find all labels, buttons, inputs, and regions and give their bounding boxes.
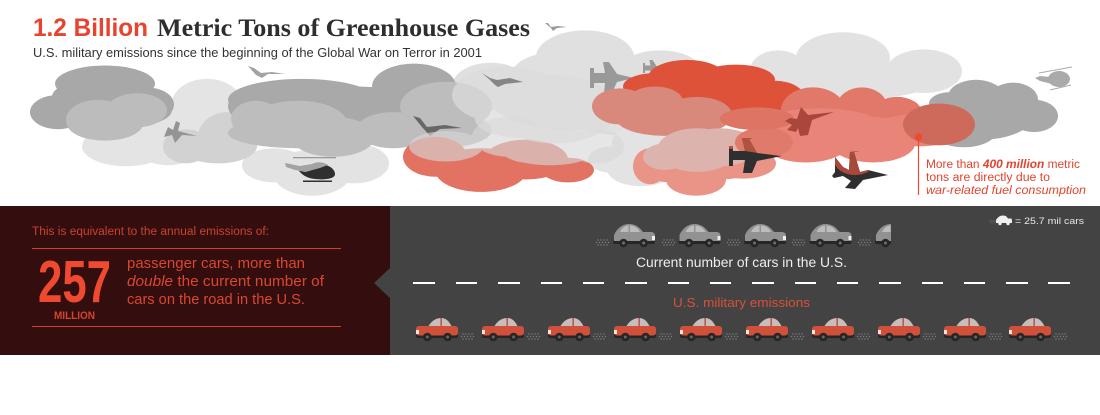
cloud: far-left mid grey bbox=[66, 93, 167, 141]
cloud: left centre mid grey bbox=[163, 112, 258, 163]
icon: plane centre bbox=[413, 116, 462, 136]
million label: MILLION bbox=[54, 310, 95, 322]
cloud: lower centre red bbox=[403, 137, 594, 192]
legend: = 25.7 mil cars bbox=[1015, 216, 1084, 227]
cloud: top-right light grey bbox=[750, 32, 962, 100]
cloud: pink band right bbox=[760, 108, 964, 162]
cloud: translucent pale centre bbox=[452, 66, 617, 143]
panel intro text: This is equivalent to the annual emissions of: bbox=[32, 226, 269, 238]
cloud: lower centre light grey bbox=[588, 122, 708, 186]
icon: plane upper left bbox=[248, 66, 285, 78]
cloud: translucent red overlay bbox=[735, 127, 793, 158]
label: military emissions: U.S. military emissions bbox=[673, 295, 811, 310]
grey cars row bbox=[596, 224, 917, 247]
panel: road bbox=[374, 206, 1100, 355]
cloud: lower light grey bbox=[242, 143, 389, 196]
cloud: callout red oval bbox=[903, 104, 975, 145]
description text: double the current number of bbox=[127, 274, 325, 290]
icon: dark jet centre right bbox=[729, 138, 782, 173]
icon: plane upper centre bbox=[482, 73, 523, 87]
callout: war-related fuel: tons are directly due to bbox=[926, 172, 1050, 184]
panel: equivalent emissions bbox=[0, 206, 390, 355]
legend bbox=[989, 216, 1084, 227]
cloud: far-left light grey bbox=[82, 79, 245, 166]
icon: red jet upper right bbox=[785, 107, 834, 136]
cloud: small red oval bbox=[720, 107, 794, 130]
cloud: far-right dark grey bbox=[929, 80, 1058, 147]
icon: plane left bbox=[164, 121, 197, 143]
subtitle: U.S. military emissions since the beginning of the Global War on Terror in 2001 bbox=[33, 46, 482, 60]
cloud: pink lower bbox=[633, 140, 776, 196]
title bbox=[33, 14, 530, 42]
cloud: centre mid grey bbox=[228, 82, 492, 157]
cloud: centre dark grey bbox=[228, 64, 477, 148]
icon: plane top centre large bbox=[590, 62, 634, 93]
icon: plane top centre small bbox=[643, 60, 665, 76]
description text: passenger cars, more than bbox=[127, 256, 305, 272]
title: Metric Tons of Greenhouse Gases bbox=[157, 15, 530, 42]
icon: helicopter upper right bbox=[1035, 67, 1072, 90]
callout: war-related fuel: war-related fuel consumption bbox=[926, 185, 1086, 197]
red cars row bbox=[416, 318, 1067, 341]
cloud: translucent grey over red bbox=[409, 117, 624, 165]
cloud: pale pink lower bbox=[643, 128, 758, 172]
icon: helicopter lower left bbox=[285, 157, 336, 182]
big number: 257 bbox=[38, 249, 111, 315]
icon: plane near title bbox=[545, 23, 567, 31]
callout: war-related fuel: More than 400 million metric bbox=[926, 159, 1080, 171]
cloud: centre top light grey bbox=[452, 30, 702, 135]
title: 1.2 Billion bbox=[33, 14, 148, 42]
cloud: muted red left bbox=[592, 86, 732, 136]
description text bbox=[127, 256, 325, 308]
cloud: red band right bbox=[778, 87, 922, 133]
road dashes bbox=[413, 282, 1070, 284]
cloud: solid red top bbox=[623, 60, 805, 117]
callout: war-related fuel bbox=[915, 133, 1086, 197]
cloud: far-left dark grey bbox=[30, 66, 174, 130]
description text: cars on the road in the U.S. bbox=[127, 292, 305, 308]
label: current cars: Current number of cars in the U.S. bbox=[636, 255, 847, 270]
icon: jet lower right bbox=[832, 151, 888, 189]
